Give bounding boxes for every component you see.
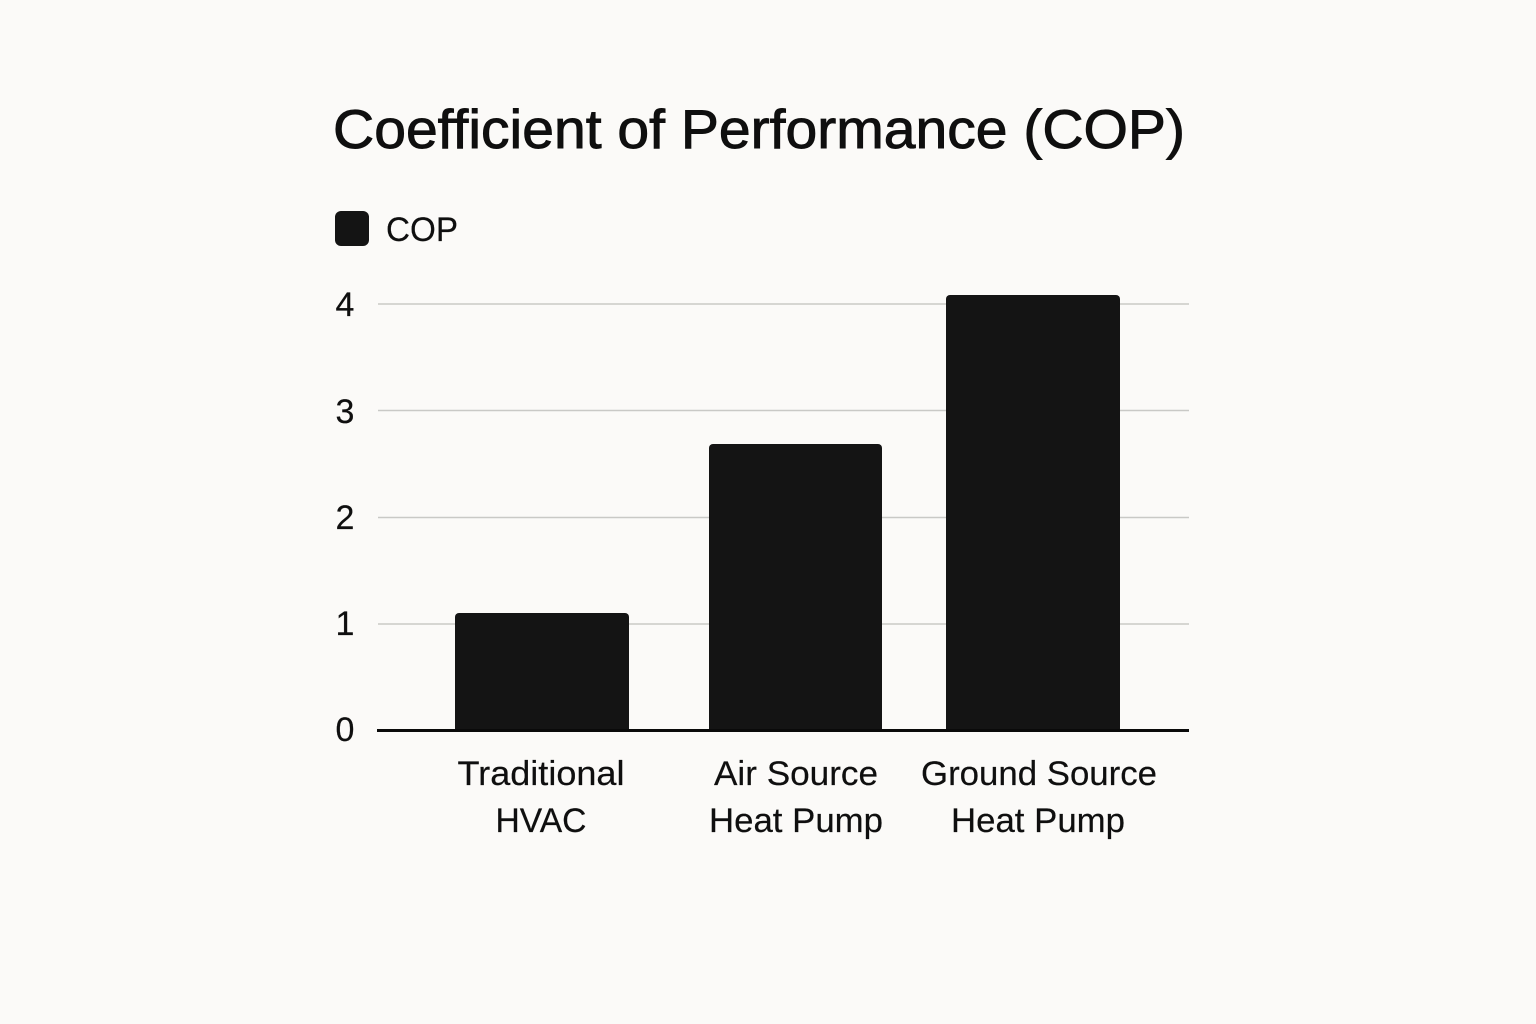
x label: Ground Source Heat Pump — [921, 755, 1157, 840]
x label: Air Source Heat Pump: Air Source — [714, 755, 878, 793]
x label: Traditional HVAC: Traditional — [458, 755, 624, 793]
bar chart — [336, 286, 1189, 840]
x label: Traditional HVAC — [458, 755, 624, 840]
y axis labels: 0 — [336, 711, 354, 749]
bar: Traditional HVAC — [455, 613, 629, 731]
y axis labels: 4 — [336, 286, 354, 324]
legend label: COP — [386, 211, 458, 249]
x label: Ground Source Heat Pump: Ground Source — [921, 755, 1157, 793]
x label: Traditional HVAC: HVAC — [496, 802, 586, 840]
y axis labels: 1 — [336, 605, 354, 643]
bar: Ground Source Heat Pump — [946, 295, 1120, 731]
y axis labels: 3 — [336, 393, 354, 431]
title: Coefficient of Performance (COP) — [333, 98, 1185, 160]
y axis labels — [336, 286, 354, 749]
x label: Ground Source Heat Pump: Heat Pump — [951, 802, 1125, 840]
bar: Air Source Heat Pump — [709, 444, 882, 731]
legend — [335, 211, 458, 249]
legend swatch — [335, 211, 369, 246]
y axis labels: 2 — [336, 499, 354, 537]
x label: Air Source Heat Pump — [709, 755, 883, 840]
x label: Air Source Heat Pump: Heat Pump — [709, 802, 883, 840]
